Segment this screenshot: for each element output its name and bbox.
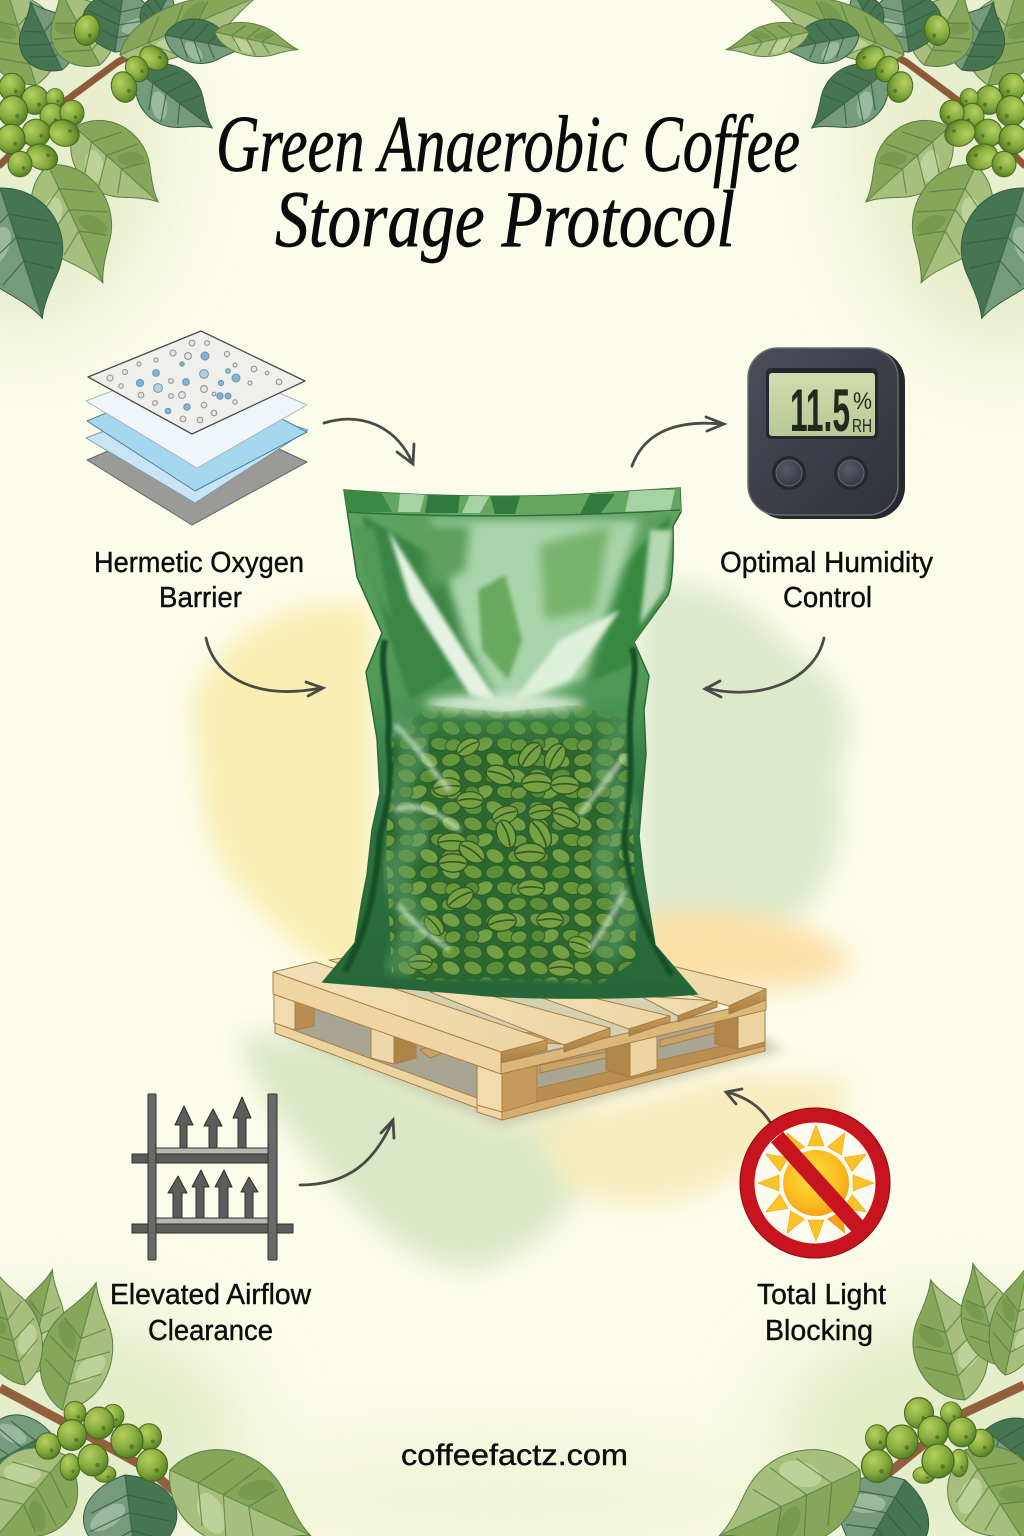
arrow: barrier down to bag [324, 419, 414, 464]
icon: hermetic barrier layers [86, 331, 308, 525]
arrow: airflow icon to pallet [300, 1120, 394, 1185]
botanical corner: top left coffee branch [0, 0, 301, 332]
botanical corner: top right coffee branch [723, 0, 1024, 332]
title: Storage Protocol [275, 176, 735, 264]
label: hermetic oxygen barrier: Hermetic Oxygen [94, 547, 304, 579]
blocks [274, 987, 295, 1030]
arrow: bag up to hygrometer [632, 417, 724, 466]
botanical corner: bottom left coffee branch [0, 1262, 330, 1536]
inner rails [300, 985, 715, 1073]
wooden pallet [273, 957, 785, 1128]
icon: elevated airflow rack [132, 1094, 293, 1260]
label: total light blocking: Total Light [757, 1279, 886, 1311]
icon: hygrometer device: 11.5 [790, 377, 850, 444]
top slats [273, 962, 547, 1052]
label: total light blocking [757, 1279, 886, 1347]
green coffee bag [323, 485, 697, 1002]
arrow: light icon to pallet [726, 1089, 772, 1125]
botanical corner: bottom right coffee branch [700, 1257, 1024, 1536]
bottom boards [275, 1023, 477, 1108]
bag seal band [340, 485, 685, 516]
label: optimal humidity control [720, 547, 933, 614]
icon: hygrometer device: RH [852, 416, 872, 436]
arrow: humidity label to bag [705, 638, 824, 697]
arrow: barrier label to bag [206, 638, 323, 696]
label: elevated airflow clearance: Elevated Airflow [110, 1279, 312, 1311]
bag upper film highlights [352, 515, 672, 715]
beans inside the bag [386, 705, 636, 985]
title: Green Anaerobic Coffee [216, 101, 800, 189]
label: hermetic oxygen barrier [94, 547, 304, 614]
label: optimal humidity control: Optimal Humidity [720, 547, 933, 579]
larger foreground beans [408, 734, 594, 976]
icon: no sunlight [740, 1108, 890, 1258]
stringer boards [273, 972, 501, 1074]
label: optimal humidity control: Control [783, 582, 872, 614]
label: total light blocking: Blocking [765, 1315, 873, 1347]
bag side translucency and gussets [342, 638, 674, 985]
label: elevated airflow clearance: Clearance [148, 1315, 273, 1347]
website footer: coffeefactz.com [401, 1439, 628, 1472]
label: elevated airflow clearance [110, 1279, 312, 1347]
icon: hygrometer device: % [853, 388, 872, 415]
icon: hygrometer device [748, 348, 905, 519]
label: hermetic oxygen barrier: Barrier [159, 582, 242, 614]
title [216, 101, 800, 264]
